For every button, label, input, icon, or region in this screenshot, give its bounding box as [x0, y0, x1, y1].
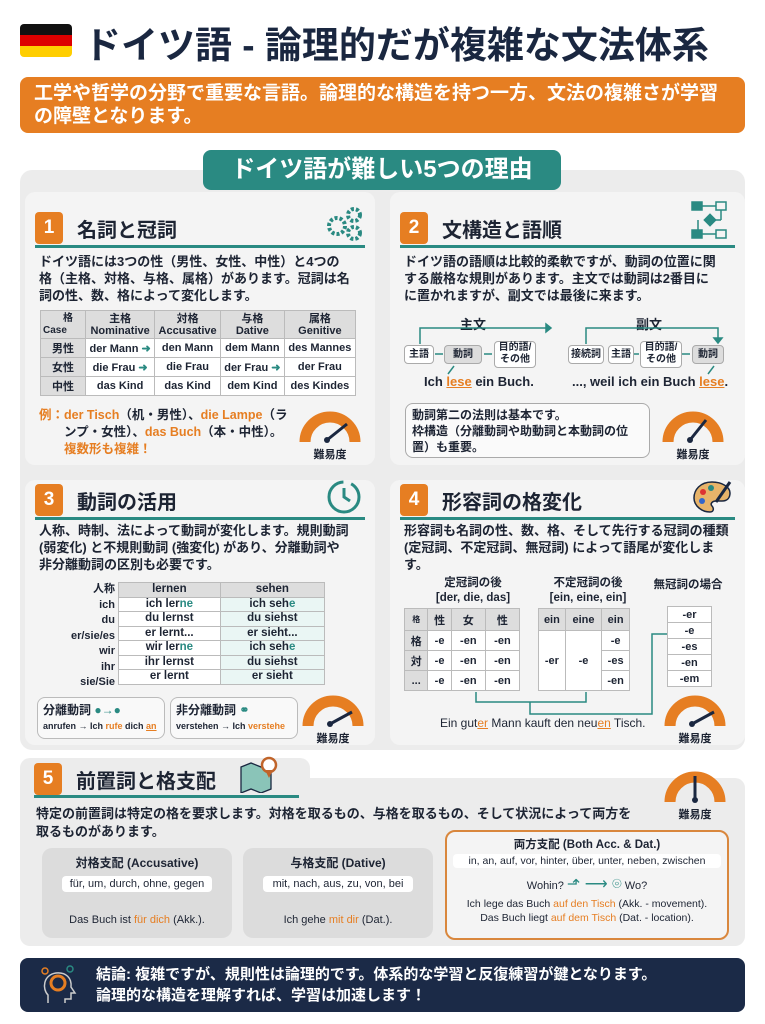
indefinite table	[538, 608, 630, 691]
text: 取るものがあります。	[36, 824, 165, 839]
box: dative: 与格支配 (Dative)	[290, 856, 386, 870]
case table: 女性	[52, 362, 74, 374]
panel: 3 verb conjugation: wir lerne	[146, 641, 193, 653]
box: both	[445, 830, 729, 940]
no-article list: -er	[682, 608, 697, 620]
panel: 3 verb conjugation: ihr	[101, 660, 115, 672]
text	[36, 806, 631, 839]
definite table: -en	[460, 634, 477, 646]
intro banner: 工学や哲学の分野で重要な言語。論理的な構造を持つ一方、文法の複雑さが学習	[34, 83, 718, 104]
header 5	[34, 756, 299, 798]
panel: 3 verb conjugation: du siehst	[247, 656, 298, 668]
definite table	[404, 608, 520, 691]
note box: 動詞第二の法則は基本です。	[412, 408, 567, 422]
inseparable verbs box: verstehen → Ich verstehe	[176, 721, 285, 731]
header 3: 動詞の活用	[77, 492, 177, 514]
connector lines	[475, 633, 667, 715]
case table: des Kindes	[291, 380, 349, 392]
case table: 中性	[52, 381, 74, 393]
header 5: 5	[43, 768, 53, 789]
box: dative: mit, nach, aus, zu, von, bei	[273, 878, 403, 890]
intro banner	[20, 77, 745, 133]
gauge	[300, 412, 360, 460]
inseparable verbs box	[170, 697, 298, 739]
box: accusative	[42, 848, 232, 938]
panel: 4 adjective declension: 不定冠詞の後	[554, 577, 622, 589]
diagram: subordinate clause: 目的語/	[645, 342, 677, 353]
diagram: main clause	[404, 317, 552, 389]
table labels: 定冠詞の後	[444, 577, 502, 589]
panel: 5 prepositions	[20, 778, 745, 946]
gauge	[662, 412, 724, 460]
icon: gears	[327, 207, 362, 241]
header 3	[35, 480, 365, 520]
header 1	[35, 207, 365, 248]
panel: 3 verb conjugation: er lernt	[150, 670, 189, 682]
diagram: main clause: 主文	[460, 317, 486, 332]
case table: die Frau	[166, 361, 209, 373]
panel: 4 adjective declension: 無冠詞の場合	[654, 579, 722, 591]
icon: palette	[693, 481, 732, 513]
panel: 3 verb conjugation: du siehst	[247, 612, 298, 624]
indefinite table: eine	[572, 614, 595, 626]
inseparable verbs box: 非分離動詞 ⚭	[176, 703, 249, 717]
definite table: -e	[435, 654, 444, 666]
no-article list	[667, 606, 712, 687]
intro banner: の障壁となります。	[34, 106, 203, 127]
header 1: 1	[44, 217, 54, 238]
case table: Accusative	[159, 324, 217, 336]
separable verbs box: 分離動詞 ●→●	[43, 703, 121, 717]
definite table: 格	[411, 636, 422, 648]
definite table: 格	[412, 615, 420, 624]
case table: 対格	[177, 312, 199, 324]
gauge	[664, 772, 726, 820]
definite table: -en	[494, 654, 511, 666]
panel: 3 verb conjugation	[25, 480, 375, 745]
panel: 3 verb conjugation: ich lerne	[146, 598, 193, 610]
panel: 3 verb conjugation: wir	[99, 645, 115, 657]
header 2: 2	[409, 217, 419, 238]
panel: 3 verb conjugation: er sieht	[252, 670, 293, 682]
diagram: subordinate clause: 接続詞	[571, 349, 601, 360]
case table: 格	[63, 312, 73, 324]
definite table: ...	[412, 674, 421, 686]
indefinite table: -er	[545, 654, 559, 666]
indefinite table: ein	[608, 614, 624, 626]
diagram: main clause: 動詞	[453, 349, 473, 360]
panel: 4 adjective declension	[390, 480, 745, 745]
box: dative: Ich gehe mit dir (Dat.).	[284, 914, 392, 926]
footer conclusion: 結論: 複雑ですが、規則性は論理的です。体系的な学習と反復練習が鍵となります。	[96, 966, 656, 983]
text: 詞の性、数、格によって変化します。	[39, 288, 258, 303]
no-article list: -en	[681, 656, 698, 668]
separable verbs box: anrufen → Ich rufe dich an	[43, 721, 157, 731]
indefinite table: ein	[544, 614, 560, 626]
case table: dem Kind	[227, 380, 277, 392]
diagram: subordinate clause: 主語	[611, 349, 631, 360]
text	[404, 254, 716, 303]
footer conclusion	[20, 958, 745, 1012]
panel: 3 verb conjugation: ich sehe	[249, 641, 295, 653]
footer conclusion: 論理的な構造を理解すれば、学習は加速します！	[96, 987, 426, 1004]
panel: 3 verb conjugation: ihr lernst	[145, 656, 194, 668]
example sentence: Ein guter Mann kauft den neuen Tisch.	[440, 716, 646, 730]
header 2: 文構造と語順	[442, 220, 562, 242]
indefinite table: -es	[608, 654, 624, 666]
box: accusative: 対格支配 (Accusative)	[76, 856, 198, 870]
definite table: 女	[463, 614, 474, 626]
table labels	[436, 576, 510, 604]
header 2	[400, 201, 735, 248]
definite table: 性	[434, 614, 445, 626]
case table: der Frau	[298, 361, 342, 373]
case table: der Mann ➜	[90, 342, 151, 354]
box: both: in, an, auf, vor, hinter, über, unter, neben, zwischen	[468, 855, 706, 867]
diagram: subordinate clause: 動詞	[698, 349, 718, 360]
text: ドイツ語には3つの性（男性、女性、中性）と4つの	[39, 254, 339, 269]
header 4	[400, 481, 735, 520]
panel: 3 verb conjugation: ich sehe	[249, 598, 295, 610]
example text: ンプ・女性）、das Buch（本・中性）。	[64, 425, 282, 439]
no-article list: -e	[685, 624, 694, 636]
text: 非分離動詞の区別も必要です。	[39, 557, 220, 572]
case table: den Mann	[162, 342, 213, 354]
case table: Nominative	[90, 324, 150, 336]
section heading badge: ドイツ語が難しい5つの理由	[231, 156, 533, 183]
icon: clock	[328, 480, 360, 514]
case table: die Frau ➜	[93, 362, 148, 374]
text: 形容詞も名詞の性、数、格、そして先行する冠詞の種類	[404, 523, 729, 538]
definite table: -en	[460, 674, 477, 686]
panel: 3 verb conjugation: du	[102, 614, 115, 626]
header 1: 名詞と冠詞	[77, 220, 177, 242]
box: both: Wohin? ⬏ ⟶ ⌾ Wo?	[527, 876, 647, 893]
header 4: 形容詞の格変化	[442, 492, 582, 514]
case table	[40, 310, 356, 396]
case table: Genitive	[298, 324, 342, 336]
panel: 3 verb conjugation: er lernt...	[145, 626, 194, 638]
definite table: 性	[497, 614, 508, 626]
diagram: main clause: 目的語/	[499, 342, 531, 353]
box: accusative: Das Buch ist für dich (Akk.).	[69, 914, 205, 926]
box: both: Das Buch liegt auf dem Tisch (Dat. - location).	[480, 912, 694, 924]
panel: 2 sentence structure	[390, 192, 745, 465]
header 5: 前置詞と格支配	[76, 771, 216, 793]
no-article list: -es	[682, 640, 697, 652]
diagram: subordinate clause: その他	[646, 354, 676, 365]
text: (定冠詞、不定冠詞、無冠詞) によって語尾が変化しま	[404, 540, 714, 555]
case table: 主格	[109, 312, 131, 324]
conjugation table	[71, 582, 325, 688]
example text: 複数形も複雑！	[64, 442, 152, 456]
icon: german flag	[20, 24, 72, 57]
case table: des Mannes	[288, 342, 351, 354]
definite table: -en	[460, 654, 477, 666]
icon: brain head	[41, 965, 76, 1003]
no-article list: -em	[680, 672, 699, 684]
text: 特定の前置詞は特定の格を要求します。対格を取るもの、与格を取るもの、そして状況によって両方を	[36, 806, 631, 821]
icon: map	[240, 756, 278, 793]
note box	[405, 403, 650, 458]
panel: 3 verb conjugation: 人称	[93, 583, 115, 595]
text	[39, 254, 350, 303]
panel: 1 nouns and articles	[25, 192, 375, 465]
example text: 例：der Tisch（机・男性）、die Lampe（ラ	[39, 408, 287, 422]
panel: 3 verb conjugation: ich	[99, 598, 115, 610]
case table: das Kind	[164, 380, 211, 392]
text: ドイツ語の語順は比較的柔軟ですが、動詞の位置に関	[404, 254, 716, 269]
panel: 3 verb conjugation: er/sie/es	[71, 630, 115, 642]
gauge	[302, 696, 364, 744]
header 3: 3	[44, 489, 54, 510]
box: accusative: für, um, durch, ohne, gegen	[70, 878, 204, 890]
box: dative	[243, 848, 433, 938]
panel: 3 verb conjugation: sehen	[256, 583, 289, 595]
box: both: Ich lege das Buch auf den Tisch (Akk. - movement).	[467, 898, 707, 910]
note box: 枠構造（分離動詞や助動詞と本動詞の位置）も重要。	[412, 424, 628, 454]
indefinite table: -e	[579, 654, 588, 666]
outer panel	[20, 170, 745, 750]
definite table: -e	[435, 674, 444, 686]
text: する厳格な規則があります。主文では動詞は2番目に	[404, 271, 709, 286]
diagram: main clause: その他	[500, 354, 530, 365]
definite table: -en	[494, 634, 511, 646]
box: both: 両方支配 (Both Acc. & Dat.)	[514, 839, 660, 851]
table labels: [der, die, das]	[436, 592, 510, 604]
definite table: 対	[411, 656, 422, 668]
example text	[39, 408, 287, 456]
panel: 3 verb conjugation: lernen	[152, 583, 187, 595]
diagram: subordinate clause: 副文	[636, 317, 662, 332]
text	[39, 523, 349, 572]
panel: 3 verb conjugation: du lernst	[145, 612, 194, 624]
indefinite table: -e	[611, 634, 621, 646]
panel: 3 verb conjugation: er sieht...	[247, 626, 298, 638]
diagram: main clause: 主語	[409, 349, 429, 360]
text: す。	[404, 557, 429, 572]
title: ドイツ語 - 論理的だが複雑な文法体系	[84, 25, 709, 66]
case table: 与格	[241, 312, 263, 324]
separable verbs box	[37, 697, 165, 739]
case table: Dative	[236, 324, 269, 336]
definite table: -e	[435, 634, 444, 646]
section heading badge	[203, 150, 561, 190]
text: 格（主格、対格、与格、属格）があります。冠詞は名	[39, 271, 350, 286]
definite table: -en	[494, 674, 511, 686]
text: 人称、時制、法によって動詞が変化します。規則動詞	[39, 523, 349, 538]
case table: 属格	[309, 312, 331, 324]
diagram: subordinate clause	[568, 317, 728, 389]
indefinite table: -en	[607, 674, 624, 686]
gauge	[664, 696, 726, 744]
diagram: subordinate clause: ..., weil ich ein Buch lese.	[572, 374, 728, 389]
case table: 男性	[52, 343, 74, 355]
panel: 4 adjective declension: [ein, eine, ein]	[550, 592, 626, 604]
case table: der Frau ➜	[224, 362, 281, 374]
text: (弱変化) と不規則動詞 (強変化) があり、分離動詞や	[39, 540, 340, 555]
header 4: 4	[409, 489, 419, 510]
text	[404, 523, 729, 572]
diagram: main clause: Ich lese ein Buch.	[424, 374, 534, 389]
icon: flowchart	[691, 201, 727, 239]
case table: das Kind	[97, 380, 143, 392]
case table: dem Mann	[225, 342, 280, 354]
text: に置かれますが、副文では最後に来ます。	[404, 288, 649, 303]
panel: 3 verb conjugation: sie/Sie	[80, 676, 115, 688]
case table: Case	[43, 324, 67, 336]
